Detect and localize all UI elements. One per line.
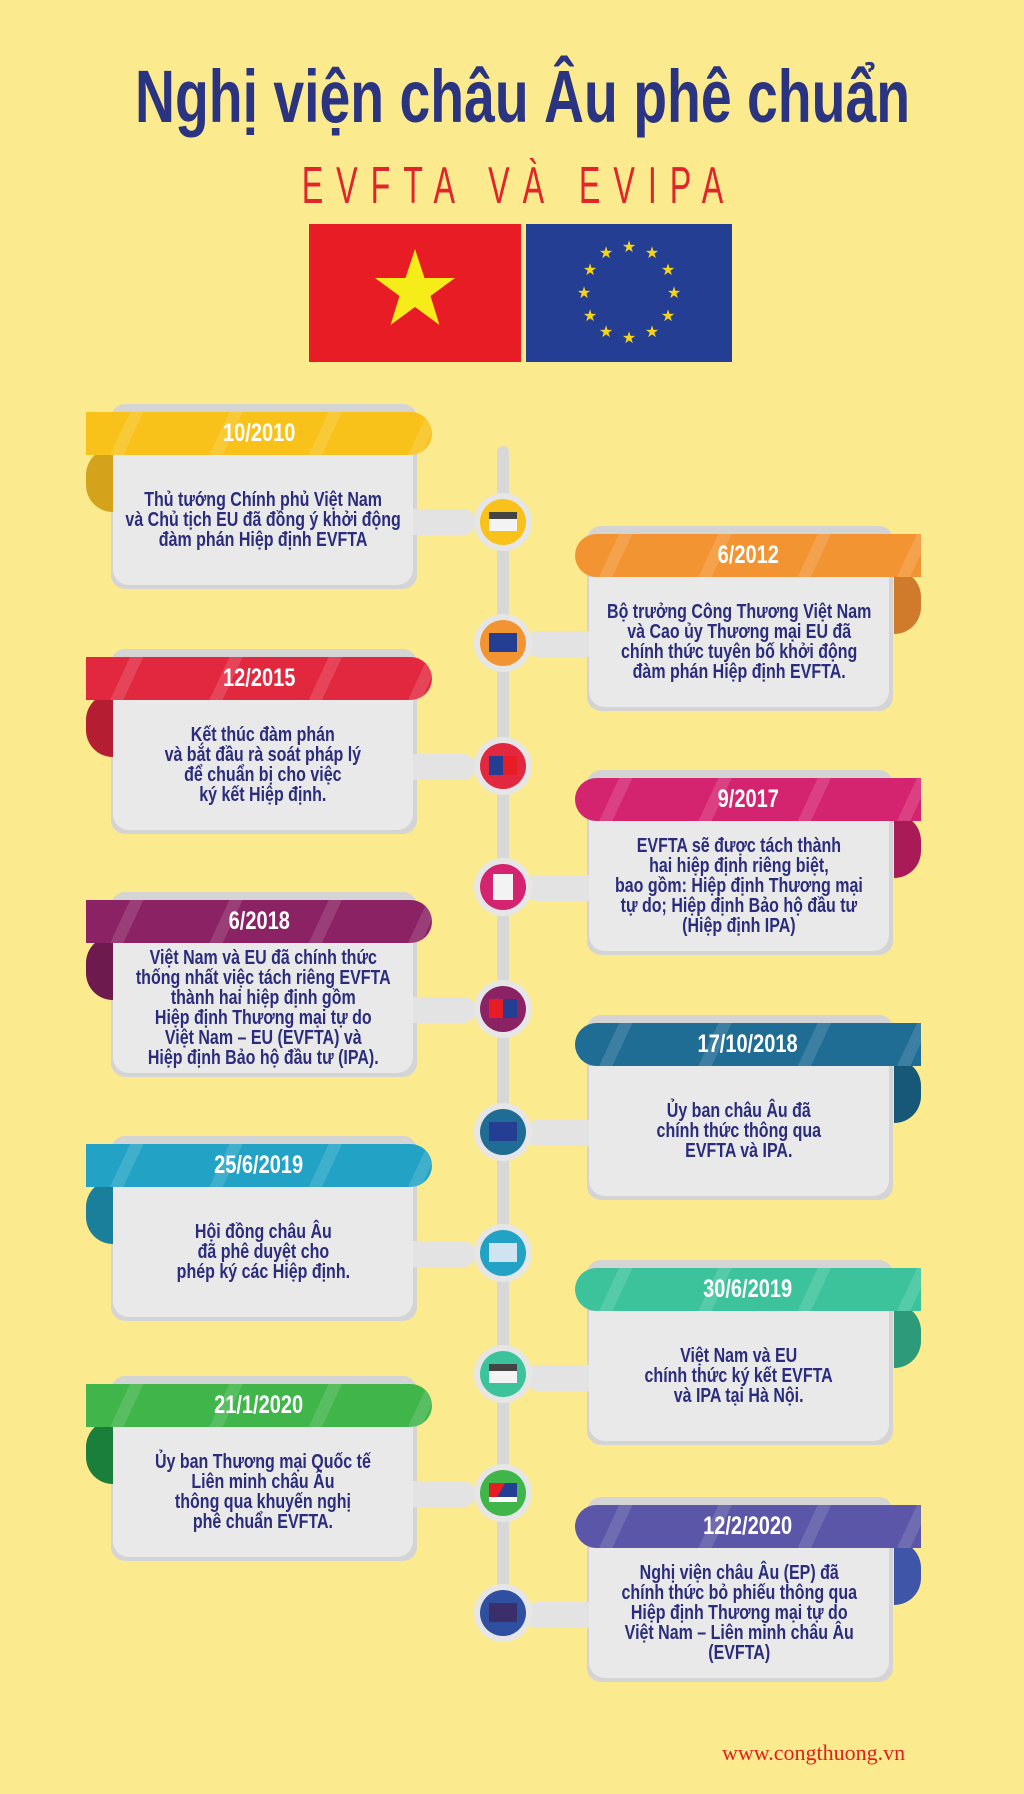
card 9: 21/1/2020: Ủy ban Thương mại Quốc tế (155, 1451, 371, 1473)
node 3 (474, 737, 532, 795)
card 2: 6/2012: và Cao ủy Thương mại EU đã (627, 621, 851, 643)
card 9: 21/1/2020: thông qua khuyến nghị (175, 1491, 351, 1513)
card 6: 17/10/2018: Ủy ban châu Âu đã (667, 1100, 811, 1122)
card 3: 12/2015: Kết thúc đàm phán (191, 724, 335, 746)
flag: EU: ★ (661, 306, 675, 325)
card 3: 12/2015: 12/2015 (223, 664, 295, 692)
flag: EU: ★ (667, 283, 681, 302)
card 4: 9/2017: 9/2017 (717, 785, 779, 813)
flag: EU: ★ (645, 243, 659, 262)
card 5: 6/2018: Hiệp định Bảo hộ đầu tư (IPA). (148, 1047, 378, 1069)
card 6: 17/10/2018 (530, 1015, 921, 1200)
node 5 (474, 980, 532, 1038)
card 2: 6/2012: chính thức tuyên bố khởi động (621, 641, 857, 663)
card 1: 10/2010 (86, 404, 474, 589)
flag: EU (526, 224, 732, 362)
card 10: 12/2/2020: Hiệp định Thương mại tự do (631, 1602, 847, 1624)
flag: EU: ★ (583, 306, 597, 325)
flag: EU: ★ (577, 283, 591, 302)
node 8 (474, 1345, 532, 1403)
card 7: 25/6/2019: 25/6/2019 (215, 1151, 303, 1179)
flag: EU: ★ (599, 243, 613, 262)
card 10: 12/2/2020: (EVFTA) (708, 1642, 770, 1664)
timeline line (497, 446, 509, 1636)
card 1: 10/2010: 10/2010 (223, 419, 295, 447)
card 2: 6/2012: đàm phán Hiệp định EVFTA. (632, 661, 846, 683)
node 4 (474, 858, 532, 916)
card 2: 6/2012: 6/2012 (717, 541, 779, 569)
node 7 (474, 1224, 532, 1282)
card 8: 30/6/2019: chính thức ký kết EVFTA (645, 1365, 833, 1387)
node 1 (474, 493, 532, 551)
card 5: 6/2018: 6/2018 (228, 907, 290, 935)
card 7: 25/6/2019: phép ký các Hiệp định. (176, 1261, 350, 1283)
card 5: 6/2018: Hiệp định Thương mại tự do (155, 1007, 371, 1029)
card 4: 9/2017: (Hiệp định IPA) (682, 915, 796, 937)
card 9: 21/1/2020 (86, 1376, 475, 1561)
card 8: 30/6/2019 (528, 1260, 921, 1445)
flag: Vietnam (309, 224, 521, 362)
card 5: 6/2018 (86, 892, 475, 1077)
card 3: 12/2015: ký kết Hiệp định. (199, 784, 327, 806)
flag: EU: ★ (661, 260, 675, 279)
card 4: 9/2017 (530, 770, 921, 955)
flag: EU: ★ (622, 328, 636, 347)
card 10: 12/2/2020: Việt Nam – Liên minh châu Âu (624, 1622, 854, 1644)
flag: EU: ★ (599, 322, 613, 341)
card 3: 12/2015 (86, 649, 475, 834)
card 8: 30/6/2019: và IPA tại Hà Nội. (674, 1385, 804, 1407)
card 2: 6/2012: Bộ trưởng Công Thương Việt Nam (607, 601, 871, 623)
node 10 (474, 1584, 532, 1642)
card 5: 6/2018: Việt Nam – EU (EVFTA) và (165, 1027, 361, 1049)
flag: EU: ★ (622, 237, 636, 256)
card 5: 6/2018: Việt Nam và EU đã chính thức (149, 947, 377, 969)
flag: EU: ★ (645, 322, 659, 341)
card 10: 12/2/2020: chính thức bỏ phiếu thông qua (621, 1582, 857, 1604)
website credit: www.congthuong.vn (722, 1740, 905, 1765)
node 9 (474, 1464, 532, 1522)
card 8: 30/6/2019: 30/6/2019 (704, 1275, 792, 1303)
card 2: 6/2012 (530, 526, 921, 711)
card 4: 9/2017: EVFTA sẽ được tách thành (637, 835, 841, 857)
card 10: 12/2/2020: 12/2/2020 (704, 1512, 792, 1540)
card 6: 17/10/2018: 17/10/2018 (698, 1030, 798, 1058)
card 9: 21/1/2020: 21/1/2020 (215, 1391, 303, 1419)
card 1: 10/2010: Thủ tướng Chính phủ Việt Nam (144, 489, 382, 511)
card 5: 6/2018: thành hai hiệp định gồm (171, 987, 355, 1009)
card 3: 12/2015: và bắt đầu rà soát pháp lý (165, 744, 361, 766)
card 8: 30/6/2019: Việt Nam và EU (680, 1345, 798, 1367)
card 6: 17/10/2018: chính thức thông qua (657, 1120, 821, 1142)
card 7: 25/6/2019: đã phê duyệt cho (197, 1241, 329, 1263)
card 6: 17/10/2018: EVFTA và IPA. (685, 1140, 793, 1162)
flags (309, 224, 732, 362)
card 1: 10/2010: và Chủ tịch EU đã đồng ý khởi động (125, 509, 401, 531)
card 4: 9/2017: tự do; Hiệp định Bảo hộ đầu tư (621, 895, 857, 917)
card 4: 9/2017: bao gồm: Hiệp định Thương mại (615, 875, 863, 897)
card 5: 6/2018: thống nhất việc tách riêng EVFTA (136, 967, 390, 989)
card 9: 21/1/2020: Liên minh châu Âu (191, 1471, 335, 1493)
card 3: 12/2015: để chuẩn bị cho việc (184, 764, 342, 786)
card 1: 10/2010: đàm phán Hiệp định EVFTA (159, 529, 367, 551)
node 2 (474, 614, 532, 672)
card 7: 25/6/2019: Hội đồng châu Âu (195, 1221, 331, 1243)
card 4: 9/2017: hai hiệp định riêng biệt, (649, 855, 829, 877)
flag: EU: ★ (583, 260, 597, 279)
card 7: 25/6/2019 (86, 1136, 475, 1321)
node 6 (474, 1103, 532, 1161)
card 9: 21/1/2020: phê chuẩn EVFTA. (193, 1511, 333, 1533)
card 10: 12/2/2020: Nghị viện châu Âu (EP) đã (639, 1562, 839, 1584)
card 10: 12/2/2020 (530, 1497, 921, 1682)
